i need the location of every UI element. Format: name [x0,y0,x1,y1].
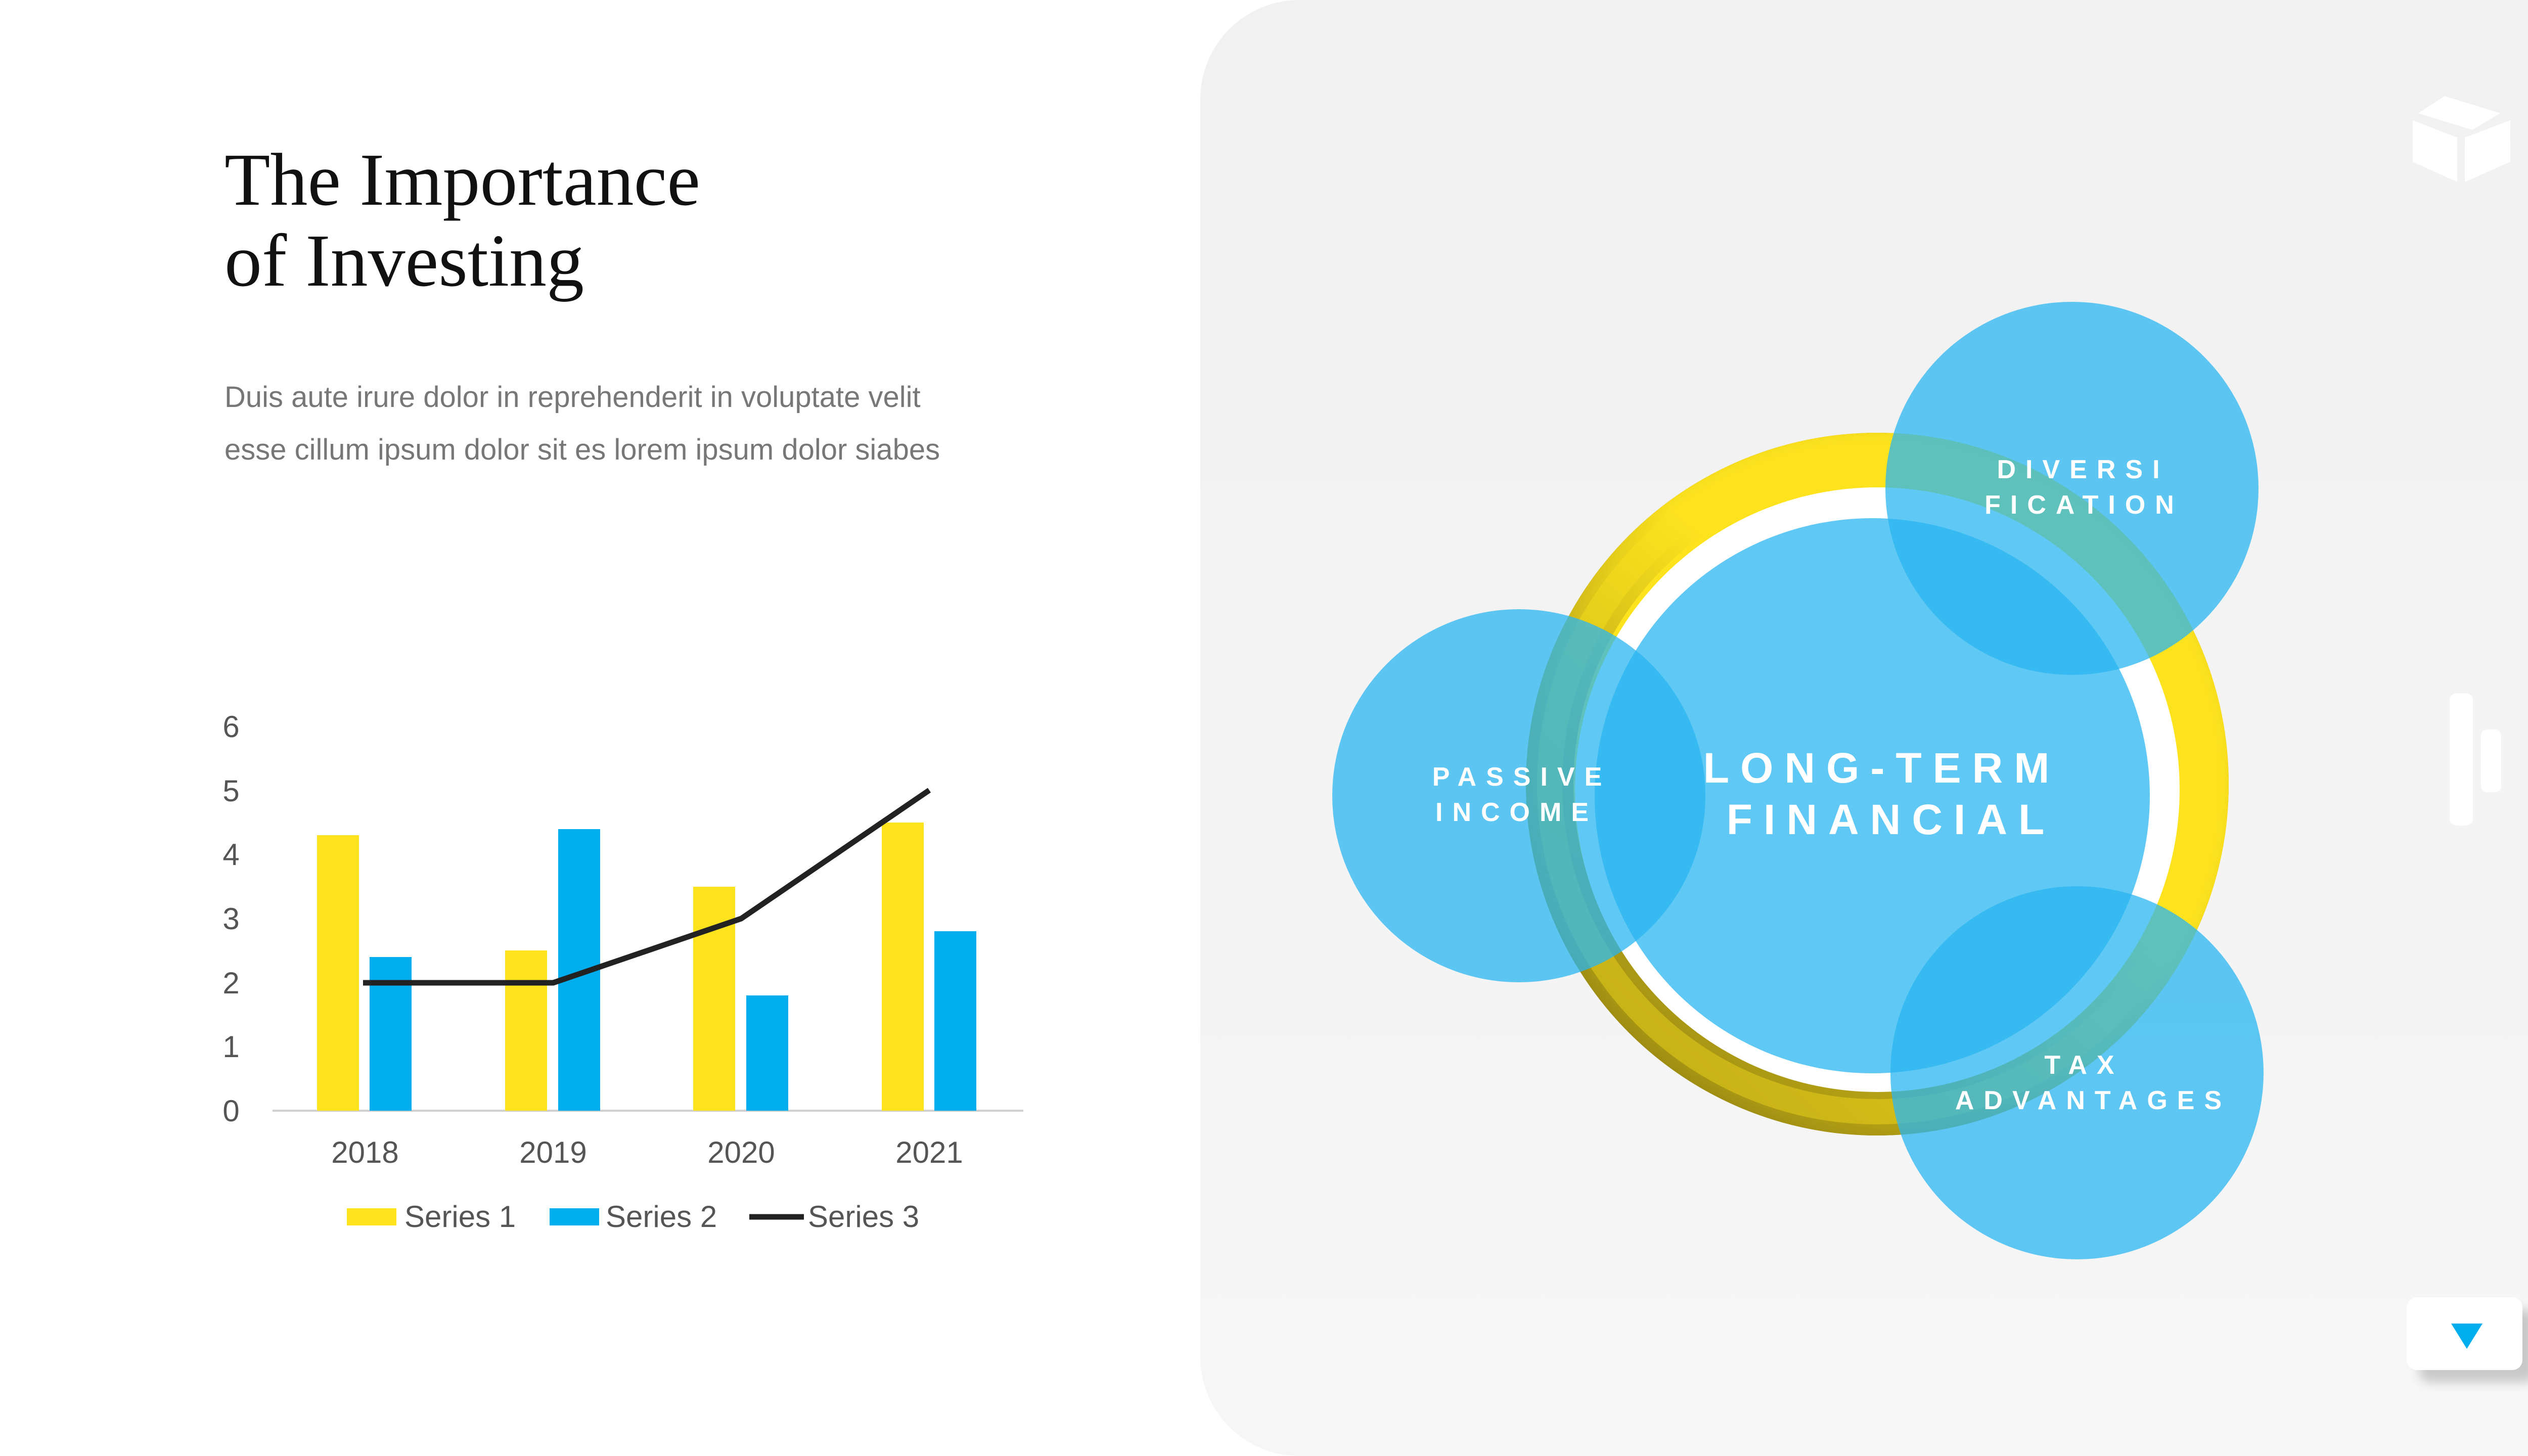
label: passive income [1432,762,1611,827]
y axis labels: 2 [222,966,240,1000]
label: diversification: FICATION [1984,490,2184,520]
button: down arrow [2407,1297,2528,1382]
label: diversification: DIVERSI [1997,455,2170,484]
x axis labels: 2019 [519,1135,587,1169]
text block: description: Duis aute irure dolor in reprehenderit in voluptate velit [224,381,921,414]
x axis labels: 2018 [331,1135,399,1169]
panel: right background [1200,0,2528,1456]
circle: center [1595,518,2150,1073]
circle: passive income [1332,609,1705,982]
x axis labels: 2020 [707,1135,775,1169]
label: center: FINANCIAL [1727,796,2055,843]
line series 3 [363,790,929,983]
y axis labels: 5 [222,774,240,808]
label: passive income: INCOME [1435,798,1598,827]
label: tax advantages: TAX [2044,1051,2124,1080]
label: passive income: PASSIVE [1432,762,1611,792]
bars series 1 [317,823,924,1111]
title [224,139,700,302]
label: center [1703,744,2060,843]
y axis labels: 6 [222,710,240,744]
text block: description [224,381,940,466]
legend [347,1200,919,1234]
y axis labels [222,710,240,1128]
bars series 2 [370,829,976,1111]
label: tax advantages: ADVANTAGES [1955,1086,2231,1115]
y axis labels: 3 [222,902,240,936]
legend: Series 2 [606,1200,717,1234]
y axis labels: 1 [222,1030,240,1064]
label: center: LONG-TERM [1703,744,2060,792]
legend: Series 3 [808,1200,919,1234]
x axis labels [331,1135,963,1169]
legend: Series 1 [404,1200,516,1234]
label: tax advantages [1955,1051,2231,1115]
chart: bar and line chart [222,710,1023,1234]
circle: tax advantages [1890,886,2264,1259]
circle: diversification [1885,302,2259,675]
x axis labels: 2021 [895,1135,963,1169]
text block: description: esse cillum ipsum dolor sit es lorem ipsum dolor siabes [224,433,940,466]
y axis labels: 0 [222,1094,240,1128]
ring: yellow [1526,433,2229,1135]
title: of Investing [224,219,584,302]
icon: toggle pills [2450,693,2501,826]
icon: box [2413,96,2510,182]
title: The Importance [224,139,700,221]
label: diversification [1984,455,2184,520]
y axis labels: 4 [222,838,240,872]
